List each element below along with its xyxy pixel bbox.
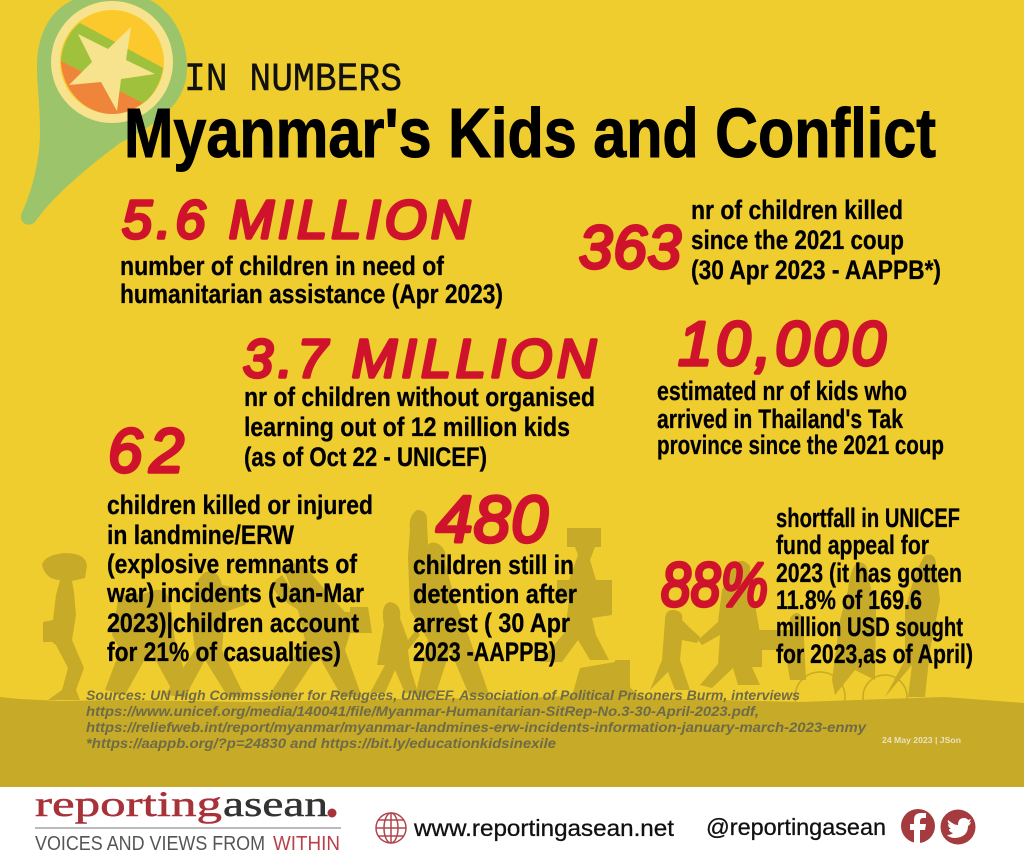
description: children killed or injured <box>107 490 373 520</box>
bicycle family <box>759 613 806 680</box>
figure: 363 <box>579 214 681 281</box>
stat: 5.6 million <box>120 190 503 309</box>
description <box>691 195 941 285</box>
description: number of children in need of <box>120 251 445 281</box>
tall walker with child <box>408 510 490 697</box>
flag badge orange band <box>61 61 143 114</box>
description: for 2023,as of April) <box>776 639 973 669</box>
silhouettes of walking refugees and ground <box>0 510 1024 787</box>
sources text <box>86 687 867 751</box>
little girl <box>370 602 420 693</box>
figure: 88% <box>661 551 768 620</box>
walker carrying box <box>268 563 372 697</box>
description <box>244 382 595 472</box>
description <box>106 490 373 667</box>
logo: reportingasean: asean <box>223 784 328 824</box>
child holding hand <box>650 610 700 690</box>
date credit: 24 May 2023 | JSon <box>882 736 961 745</box>
description: children still in <box>413 550 574 580</box>
heading: in numbers: IN NUMBERS <box>184 58 402 103</box>
sources text: https://www.unicef.org/media/140041/file/Myanmar-Humanitarian-SitRep-No.3-30-April-2023.pdf, <box>86 703 759 719</box>
sources text: https://reliefweb.int/report/myanmar/myanmar-landmines-erw-incidents-information-january-march-2023-enmy <box>86 719 867 735</box>
description: arrest ( 30 Apr <box>413 608 570 638</box>
description: fund appeal for <box>776 530 929 560</box>
description <box>657 376 944 460</box>
description: 2023 -AAPPB) <box>413 637 556 667</box>
walker with boxes <box>540 528 612 662</box>
icon: Myanmar flag map pin <box>21 0 187 225</box>
description: for 21% of casualties) <box>107 637 341 667</box>
description: since the 2021 coup <box>691 225 904 255</box>
logo: reportingasean <box>35 784 341 855</box>
icon: facebook <box>901 809 935 843</box>
figure: 5.6 MILLION <box>122 190 471 250</box>
figure: 480 <box>436 482 548 556</box>
icon: twitter <box>940 810 976 844</box>
walker with bundle <box>42 553 87 700</box>
description: in landmine/ERW <box>107 520 294 550</box>
description: humanitarian assistance (Apr 2023) <box>120 279 503 309</box>
flag badge green band <box>61 23 163 103</box>
sources text: *https://aappb.org/?p=24830 and https://bit.ly/educationkidsinexile <box>86 735 556 751</box>
description: nr of children killed <box>691 195 903 225</box>
description: nr of children without organised <box>244 382 595 412</box>
flag star <box>69 27 155 111</box>
stat: 62 <box>106 417 373 667</box>
stat: 363 <box>579 195 941 285</box>
stat: 88% <box>661 503 973 669</box>
description <box>776 503 973 669</box>
description: 2023)|children account <box>107 608 359 638</box>
description: province since the 2021 coup <box>657 430 944 460</box>
figure: 10,000 <box>678 310 886 379</box>
website: www.reportingasean.net <box>413 815 675 841</box>
stat: 10,000 <box>657 310 944 460</box>
figure: 3.7 MILLION <box>243 329 597 389</box>
description: detention after <box>413 579 577 609</box>
tagline: VOICES AND VIEWS FROM <box>35 833 265 855</box>
ground <box>0 660 1024 787</box>
icon: globe <box>376 813 406 843</box>
description: (as of Oct 22 - UNICEF) <box>244 442 487 472</box>
social handle: @reportingasean <box>706 814 886 840</box>
description: arrived in Thailand's Tak <box>657 404 904 434</box>
description: (30 Apr 2023 - AAPPB*) <box>691 255 941 285</box>
stat: 480 <box>413 482 577 667</box>
description <box>120 251 503 309</box>
logo: reportingasean: WITHIN <box>273 833 340 855</box>
sources text: Sources: UN High Commssioner for Refugees, UNICEF, Association of Political Prisoners Burm, interviews <box>86 687 800 703</box>
description <box>413 550 577 667</box>
stat: 3.7 million <box>243 329 597 472</box>
footer band <box>0 787 1024 858</box>
wordmark: reporting <box>35 784 222 824</box>
description: million USD sought <box>776 612 963 642</box>
pin body <box>21 0 187 225</box>
description: learning out of 12 million kids <box>244 412 570 442</box>
description: war) incidents (Jan-Mar <box>106 578 364 608</box>
description: estimated nr of kids who <box>657 376 907 406</box>
woman holding hand <box>698 561 762 688</box>
description: 2023 (it has gotten <box>776 558 962 588</box>
flag badge yellow field <box>60 10 164 114</box>
flag badge ring <box>51 1 173 123</box>
figure: 62 <box>108 417 184 486</box>
description: shortfall in UNICEF <box>776 503 960 533</box>
walker pair left <box>105 590 190 695</box>
description: (explosive remnants of <box>107 549 358 579</box>
description: 11.8% of 169.6 <box>776 585 922 615</box>
